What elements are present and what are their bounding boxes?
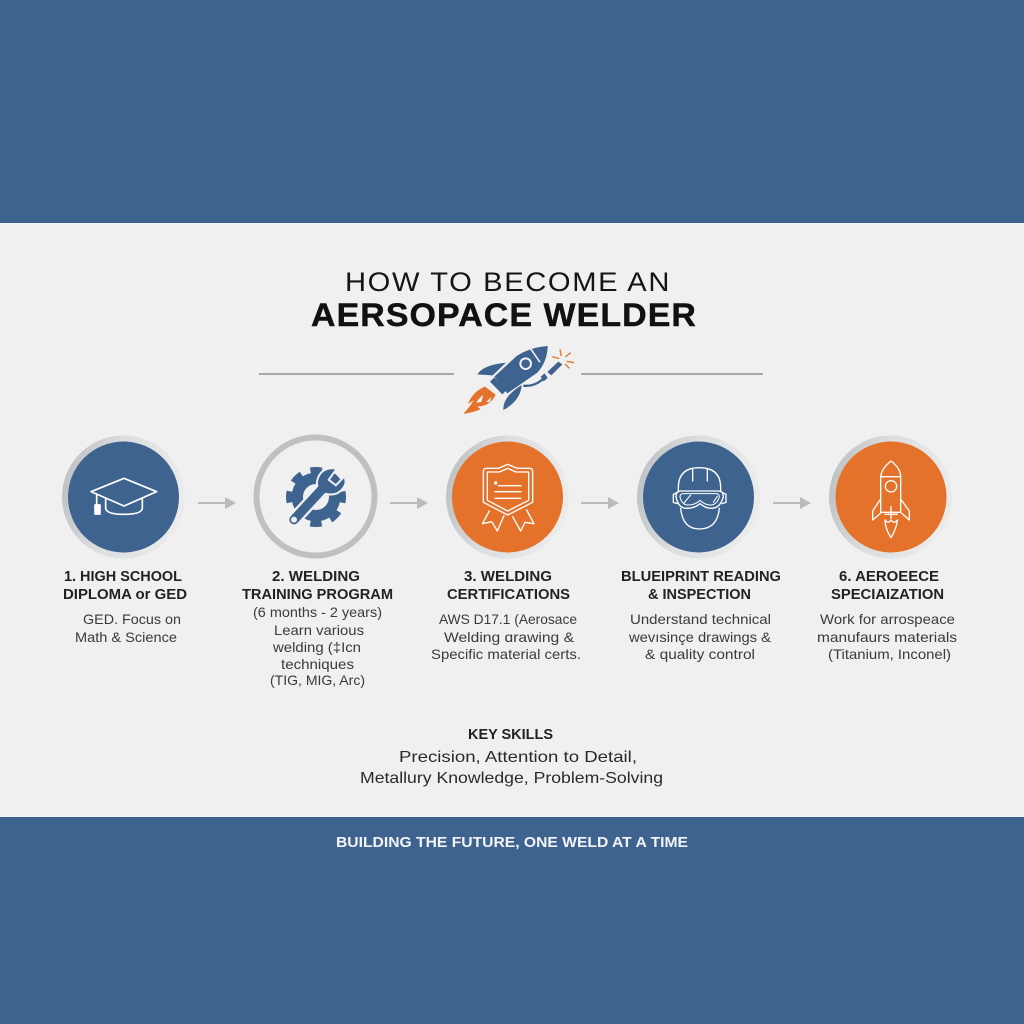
icon: rocket bbox=[829, 436, 952, 558]
icon: rocket with welding torch bbox=[463, 346, 574, 414]
text: step 1: Math & Science bbox=[75, 629, 177, 645]
heading: step 1: DIPLOMA or GED bbox=[63, 587, 187, 603]
icon: certificate badge bbox=[446, 436, 569, 558]
arrow 3 bbox=[581, 497, 619, 509]
text: step 2: (6 months - 2 years) bbox=[253, 604, 382, 620]
heading: step 5: SPECIAIZATION bbox=[831, 587, 944, 603]
text: step 3: AWS D17.1 (Aerosace bbox=[439, 611, 577, 627]
key skills: KEY SKILLS bbox=[468, 727, 553, 743]
title divider right bbox=[581, 373, 763, 375]
text: step 5 bbox=[817, 611, 957, 662]
text: step 4: wevısinçe drawings & bbox=[628, 629, 772, 645]
step 2 bbox=[242, 438, 393, 688]
key skills bbox=[360, 727, 663, 787]
text: step 2 bbox=[253, 604, 382, 688]
text: step 4: Understand technical bbox=[630, 611, 771, 627]
icon: welder helmet and goggles bbox=[637, 436, 760, 558]
arrow 1 bbox=[198, 497, 236, 509]
title: AERSOPACE WELDER bbox=[311, 297, 697, 333]
text: step 2: Learn various bbox=[274, 622, 364, 638]
step 3 bbox=[431, 436, 581, 662]
step 4 bbox=[621, 436, 781, 662]
heading: step 5: 6. AEROEECE bbox=[839, 569, 939, 585]
top band bbox=[0, 0, 1024, 223]
text: step 5: manufaurs materials bbox=[817, 629, 957, 645]
text: step 4 bbox=[628, 611, 772, 662]
footer tagline: BUILDING THE FUTURE, ONE WELD AT A TIME bbox=[336, 834, 688, 851]
arrow 4 bbox=[773, 497, 811, 509]
text: step 1: GED. Focus on bbox=[83, 611, 181, 627]
bottom band bbox=[0, 817, 1024, 1024]
heading: step 3: 3. WELDING bbox=[464, 569, 552, 585]
text: step 3: Specific material certs. bbox=[431, 646, 581, 662]
heading: step 4: & INSPECTION bbox=[648, 587, 751, 603]
heading: step 1 bbox=[63, 569, 187, 603]
text: step 3: Welding ɑrawing & bbox=[444, 629, 575, 645]
text: step 5: Work for arrospeace bbox=[820, 611, 955, 627]
key skills: Precision, Attention to Detail, bbox=[399, 749, 637, 766]
heading: step 4: BLUEIPRINT READING bbox=[621, 569, 781, 585]
heading: step 2: 2. WELDING bbox=[272, 569, 360, 585]
text: step 1 bbox=[75, 611, 181, 645]
heading: step 1: 1. HIGH SCHOOL bbox=[64, 569, 182, 585]
heading: step 5 bbox=[831, 569, 944, 603]
key skills: Metallury Knowledge, Problem-Solving bbox=[360, 770, 663, 787]
text: step 2: techniques bbox=[281, 656, 354, 672]
title bbox=[311, 267, 697, 333]
arrow 2 bbox=[390, 497, 428, 509]
step 5 bbox=[817, 436, 957, 662]
heading: step 2: TRAINING PROGRAM bbox=[242, 587, 393, 603]
text: step 2: welding (‡Icn bbox=[272, 639, 361, 655]
text: step 3 bbox=[431, 611, 581, 662]
text: step 5: (Titanium, Inconel) bbox=[828, 646, 951, 662]
title divider left bbox=[259, 373, 454, 375]
icon: gear and wrench bbox=[256, 438, 374, 556]
text: step 2: (TIG, MIG, Arc) bbox=[270, 672, 365, 688]
heading: step 4 bbox=[621, 569, 781, 603]
step 1 bbox=[62, 436, 187, 645]
text: step 4: & quality control bbox=[645, 646, 755, 662]
heading: step 3: CERTIFICATIONS bbox=[447, 587, 570, 603]
heading: step 2 bbox=[242, 569, 393, 603]
icon: graduation cap bbox=[62, 436, 185, 558]
title: HOW TO BECOME AN bbox=[345, 267, 671, 297]
heading: step 3 bbox=[447, 569, 570, 603]
